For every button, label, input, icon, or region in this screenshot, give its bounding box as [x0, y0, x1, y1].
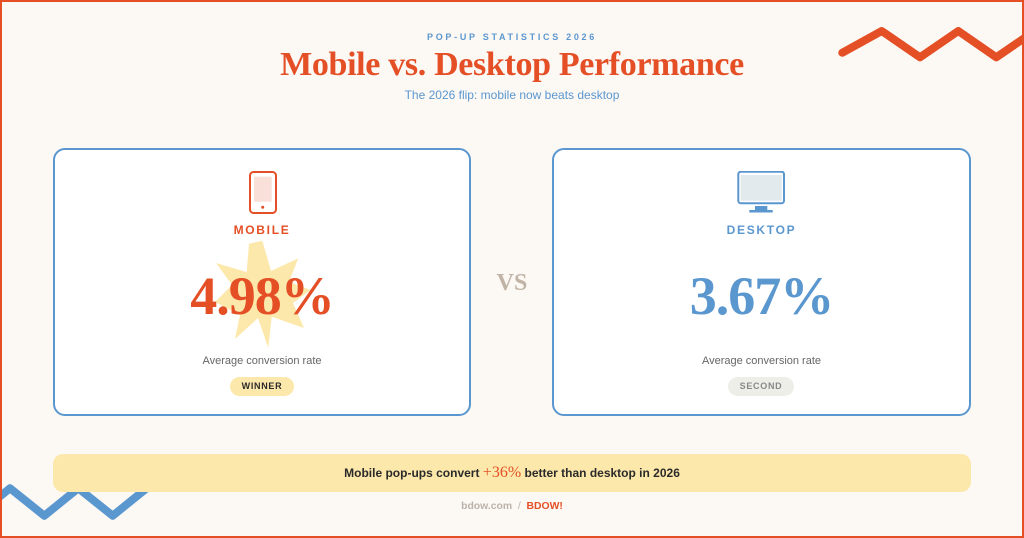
footer: bdow.com / BDOW!: [461, 500, 563, 512]
icon: monitor: [737, 171, 785, 212]
label: desktop: DESKTOP: [727, 223, 796, 237]
panel: mobile: [53, 148, 471, 416]
caption: average conversion rate: Average conversion rate: [702, 355, 821, 367]
icon: starburst: [215, 240, 310, 348]
badge: winner: [230, 377, 294, 396]
badge: second: [728, 377, 794, 396]
title: Mobile vs. Desktop Performance: [280, 46, 744, 83]
label: mobile: MOBILE: [234, 223, 290, 237]
vs label: VS: [497, 270, 527, 296]
subtitle: The 2026 flip: mobile now beats desktop: [405, 88, 619, 102]
badge: second: SECOND: [740, 381, 782, 391]
value: 3.67%: 3.67%: [690, 266, 833, 326]
caption: average conversion rate: Average conversion rate: [202, 355, 322, 367]
banner: [53, 454, 971, 492]
badge: winner: WINNER: [242, 381, 282, 391]
panel: desktop: [552, 148, 971, 416]
icon: phone: [249, 171, 277, 214]
value: 4.98%: 4.98%: [190, 266, 334, 326]
banner: Mobile pop-ups convert +36% better than desktop in 2026: [344, 464, 680, 481]
eyebrow: POP-UP STATISTICS 2026: [427, 32, 597, 42]
